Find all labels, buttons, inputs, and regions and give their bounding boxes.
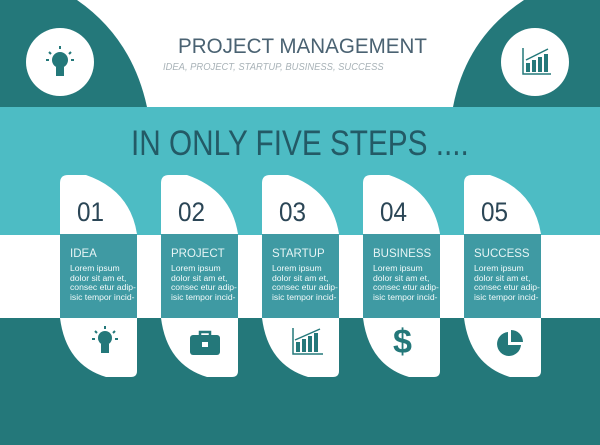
icon: briefcase [190, 330, 220, 355]
card 2 [161, 175, 238, 377]
card 1: IDEA [70, 248, 97, 260]
icon: lightbulb [92, 326, 118, 353]
card 5: SUCCESS [474, 248, 530, 260]
card 3: STARTUP [272, 248, 325, 260]
icon: chart [292, 328, 323, 355]
card 2: 02 [178, 197, 205, 227]
card 3 [262, 175, 339, 377]
card 5: 05 [481, 197, 508, 227]
icon: dollar: $ [393, 323, 412, 361]
card 3: 03 [279, 197, 306, 227]
card 2: PROJECT [171, 248, 225, 260]
corner shapes [0, 0, 600, 107]
heading: IN ONLY FIVE STEPS .... [131, 124, 469, 163]
card 1 [60, 175, 137, 377]
card 4: Lorem ipsum dolor sit am et, consec etur adip-isic tempor incid- [373, 263, 439, 302]
card 5: Lorem ipsum dolor sit am et, consec etur adip-isic tempor incid- [474, 263, 540, 302]
subtitle: IDEA, PROJECT, STARTUP, BUSINESS, SUCCESS [163, 62, 384, 73]
card 4: BUSINESS [373, 248, 431, 260]
card 4: 04 [380, 197, 407, 227]
icon: chart circle [501, 28, 569, 96]
card 3: Lorem ipsum dolor sit am et, consec etur adip-isic tempor incid- [272, 263, 338, 302]
card 2: Lorem ipsum dolor sit am et, consec etur adip-isic tempor incid- [171, 263, 237, 302]
title: PROJECT MANAGEMENT [178, 35, 427, 58]
icon: lightbulb circle [26, 28, 94, 96]
card 1: Lorem ipsum dolor sit am et, consec etur adip-isic tempor incid- [70, 263, 136, 302]
card 1: 01 [77, 197, 104, 227]
icon: pie chart [497, 330, 523, 356]
card 5 [464, 175, 541, 377]
card 4 [363, 175, 440, 377]
